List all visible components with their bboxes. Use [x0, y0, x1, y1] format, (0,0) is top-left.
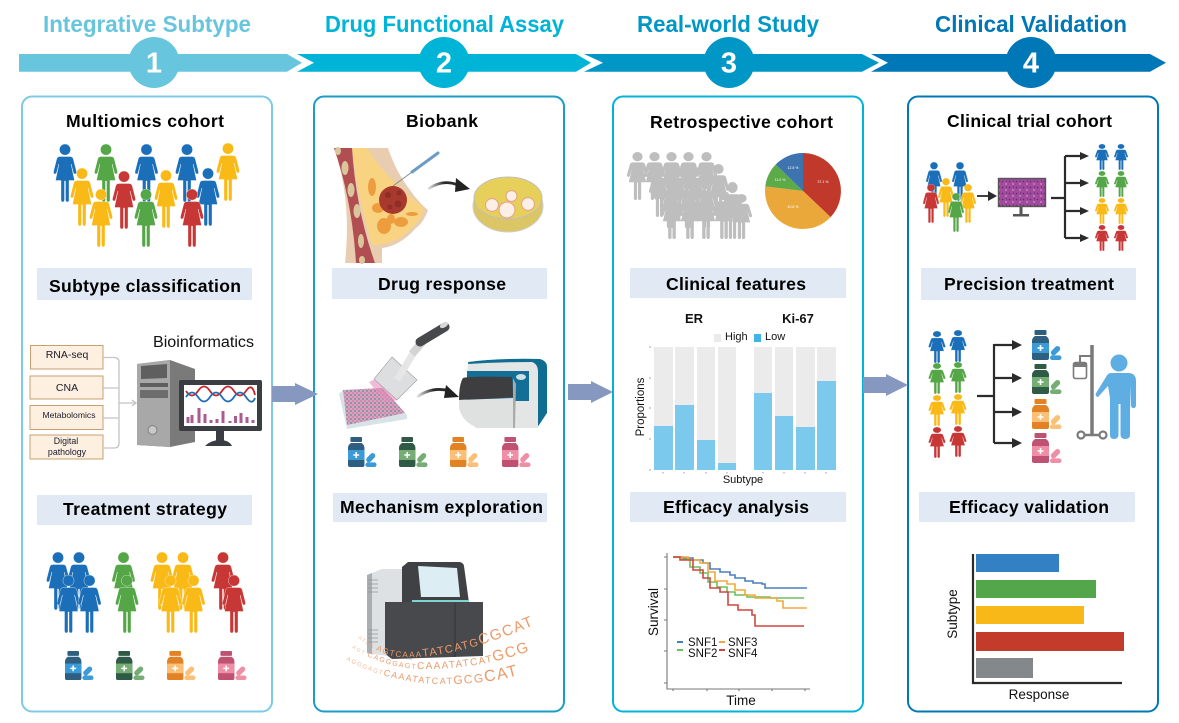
response bar chart	[945, 554, 1124, 702]
panel: real-world study	[613, 96, 863, 712]
legend: SNF subtypes	[677, 637, 758, 660]
panel: clinical validation	[908, 96, 1158, 712]
heading: retrospective cohort: Retrospective cohort	[650, 112, 833, 132]
stage 1 title: Integrative Subtype	[43, 11, 251, 37]
stage 3 number badge: 3	[721, 48, 737, 80]
icon: stratified patients	[1095, 144, 1128, 251]
icon: drug bottles row	[65, 651, 247, 680]
pie chart: 12.5 %	[788, 166, 798, 170]
curve: SNF3	[673, 557, 807, 608]
progress band: stage arrows	[19, 54, 1166, 72]
axis label: subtype: Subtype	[723, 474, 763, 486]
legend: SNF subtypes: SNF4	[728, 648, 758, 660]
stacked bar chart: ER and Ki-67	[635, 311, 836, 486]
omics input boxes: Metabolomics	[42, 410, 96, 420]
axis label: subtype: Subtype	[945, 589, 960, 639]
heading bar: efficacy analysis	[630, 492, 846, 522]
icon: digital pathology monitor	[998, 178, 1046, 216]
heading bar: mechanism exploration	[333, 493, 547, 522]
heading bar: treatment strategy	[37, 495, 252, 525]
curve: SNF2	[673, 557, 804, 598]
arrows: treatment assignment tree	[977, 340, 1022, 448]
heading bar: drug response	[332, 268, 547, 299]
icon: computer tower	[137, 360, 195, 447]
axis label: survival: Survival	[646, 588, 661, 636]
heading bar: efficacy validation	[919, 492, 1135, 522]
arrows: stratification tree	[1051, 152, 1089, 242]
icon: multiomics crowd	[53, 143, 240, 247]
legend: SNF subtypes: SNF3	[728, 637, 757, 649]
axis label: time: Time	[726, 693, 756, 708]
bars	[649, 347, 836, 474]
curve: SNF4	[673, 557, 804, 626]
heading: biobank: Biobank	[406, 111, 478, 131]
icon: green subtype group	[112, 552, 139, 633]
stage 3 title: Real-world Study	[637, 11, 819, 37]
arrow: biopsy to culture	[428, 178, 470, 192]
heading bar: precision treatment: Precision treatment	[944, 274, 1114, 294]
omics input boxes: Digital	[54, 436, 78, 446]
stage 2 title: Drug Functional Assay	[325, 11, 564, 37]
icon: trial patient group	[923, 162, 976, 232]
stage 2 number badge	[418, 37, 470, 88]
stage 4 title: Clinical Validation	[935, 11, 1127, 37]
heading bar: precision treatment	[921, 268, 1136, 300]
legend: SNF subtypes: SNF1	[688, 637, 717, 649]
icon: grey patient crowd	[627, 152, 752, 239]
stage 1 number badge: 1	[146, 48, 162, 80]
illustration: breast tissue with biopsy	[334, 147, 438, 264]
arrow: patients to pathology	[977, 191, 997, 201]
chart titles: ER	[685, 311, 704, 326]
heading bar: efficacy analysis: Efficacy analysis	[663, 497, 809, 517]
stage 3 number badge	[704, 37, 754, 88]
curve: SNF1	[673, 557, 807, 588]
legend: high and low: Low	[765, 331, 785, 343]
stage 4 number badge: 4	[1023, 48, 1039, 80]
icon: petri dish with organoids	[473, 177, 543, 232]
legend: high and low: High	[725, 331, 748, 343]
heading bar: subtype classification: Subtype classification	[49, 276, 241, 296]
heading bar: efficacy validation: Efficacy validation	[949, 497, 1109, 517]
chart titles	[685, 311, 814, 326]
stage 1 number badge	[128, 37, 180, 88]
omics input boxes: pathology	[48, 447, 87, 457]
heading: clinical trial cohort: Clinical trial cohort	[947, 111, 1112, 131]
omics input boxes: RNA-seq	[46, 349, 88, 361]
heading bar: treatment strategy: Treatment strategy	[63, 499, 227, 519]
sequence letters: AGGGAGTCAAATATCATGCGCAT	[346, 657, 516, 684]
icon: patient receiving treatment	[1096, 354, 1136, 439]
icon: subtype patient columns	[928, 330, 967, 458]
omics input boxes: CNA	[56, 382, 78, 394]
pie chart: 40.8 %	[788, 205, 798, 209]
axis label: proportions: Proportions	[635, 377, 647, 436]
survival curves	[646, 553, 810, 708]
sequence letters: ATGA AGTCAAATATCATGCGCAT	[358, 616, 530, 658]
arrow: stage 3 to 4	[863, 374, 908, 396]
stage 2 number badge: 2	[436, 48, 452, 80]
pie chart: 11.0 %	[775, 178, 785, 182]
illustration: plate reader	[459, 359, 547, 428]
legend: high and low	[714, 331, 785, 343]
omics input boxes	[30, 346, 103, 459]
illustration: pipette over well plate	[339, 321, 449, 429]
chart titles: Ki-67	[782, 311, 814, 326]
label: bioinformatics: Bioinformatics	[153, 334, 254, 351]
arrow: plate to reader	[417, 385, 459, 398]
panel: drug functional assay	[313, 96, 565, 712]
arrow: stage 2 to 3	[568, 381, 613, 403]
axis label: response: Response	[1009, 687, 1069, 702]
heading: multiomics cohort: Multiomics cohort	[66, 111, 224, 131]
heading bar: subtype classification	[37, 268, 252, 300]
pie chart: 37.1 %	[818, 180, 828, 184]
connector arrows to computer	[103, 358, 136, 448]
arrow: stage 1 to 2	[272, 383, 318, 405]
icon: IV stand	[1074, 345, 1106, 438]
sequence letters	[346, 616, 530, 684]
heading bar: clinical features	[630, 268, 846, 298]
panel: integrative subtype	[22, 96, 272, 712]
icon: red subtype group	[211, 552, 246, 633]
bars by subtype	[976, 554, 1124, 678]
illustration: sequencer	[367, 562, 483, 660]
icon: yellow subtype group	[150, 552, 205, 633]
icon: monitor with DNA and bars	[179, 380, 262, 446]
icon: drug bottles row	[348, 437, 531, 467]
icon: blue subtype group	[46, 552, 101, 633]
sequence letters: AGT CAGGGAGTCAAATATCATGCG	[352, 642, 528, 670]
legend: SNF subtypes: SNF2	[688, 648, 717, 660]
heading bar: drug response: Drug response	[378, 274, 506, 294]
heading bar: clinical features: Clinical features	[666, 274, 806, 294]
heading bar: mechanism exploration: Mechanism exploration	[340, 497, 543, 517]
icon: treatment drug bottles	[1032, 330, 1062, 463]
pie chart	[765, 153, 841, 229]
stage 4 number badge	[1006, 37, 1056, 88]
